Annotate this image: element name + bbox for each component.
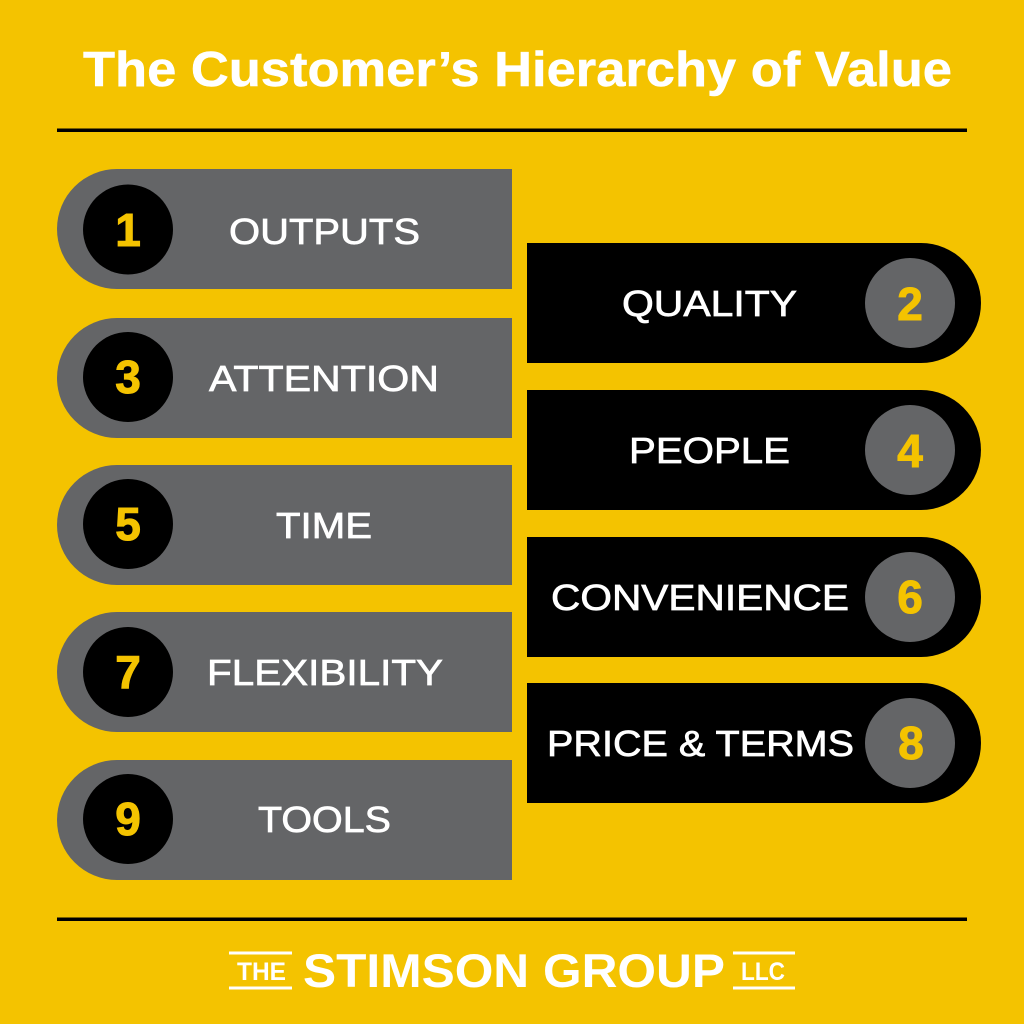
item 3: attention: ATTENTION [209,358,439,399]
item 7: flexibility: 7 [115,646,141,698]
item 6: convenience [527,537,981,657]
item 2: quality: QUALITY [622,283,797,324]
item 4: people [527,390,981,510]
item 7: flexibility [57,612,512,732]
item 7: flexibility: FLEXIBILITY [207,652,443,693]
item 8: price and terms: 8 [898,717,924,769]
footer logo: THE [237,958,286,986]
footer logo: LLC [741,958,785,986]
item 9: tools [57,760,512,880]
item 5: time: TIME [276,505,372,546]
item 3: attention [57,318,512,438]
item 3: attention: 3 [115,351,141,403]
item 5: time: 5 [115,498,141,550]
item 4: people: 4 [897,425,923,477]
item 8: price and terms [527,683,981,803]
item 9: tools: TOOLS [258,799,391,840]
item 1: outputs: 1 [115,204,141,256]
item 9: tools: 9 [115,793,141,845]
item 5: time [57,465,512,585]
footer logo: STIMSON GROUP [303,944,725,997]
item 6: convenience: CONVENIENCE [551,577,849,618]
item 1: outputs [57,169,512,289]
item 8: price and terms: PRICE & TERMS [547,723,854,764]
item 2: quality: 2 [897,278,923,330]
item 4: people: PEOPLE [629,430,790,471]
item 2: quality [527,243,981,363]
title: The Customer’s Hierarchy of Value [83,43,952,97]
item 1: outputs: OUTPUTS [229,211,420,252]
item 6: convenience: 6 [897,571,923,623]
